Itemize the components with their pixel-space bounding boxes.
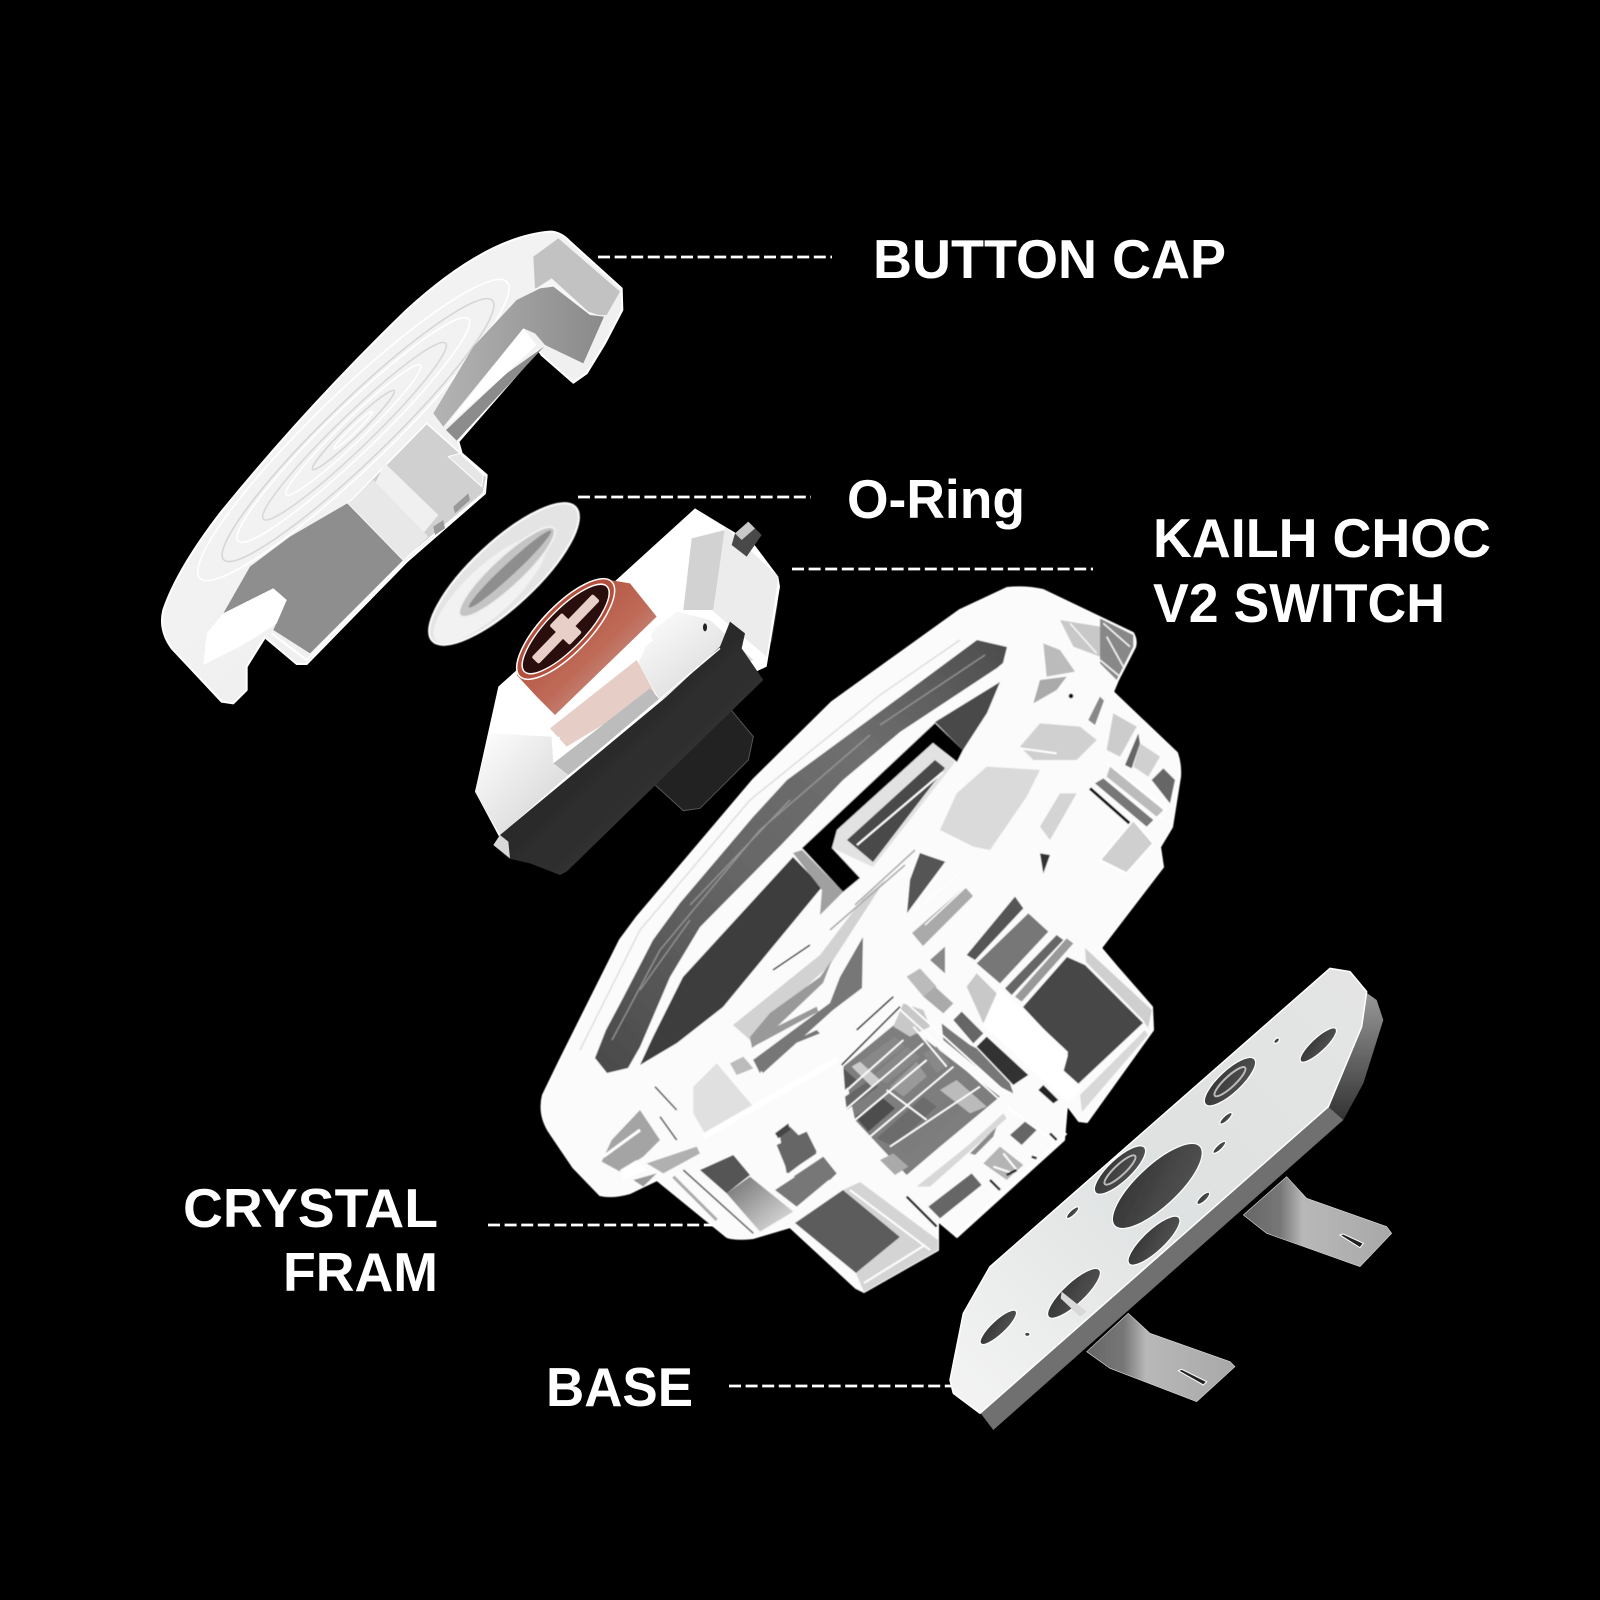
crystal top-right texture (1100, 618, 1133, 680)
label: Kailh Choc V2 switch: V2 SWITCH (1153, 572, 1445, 634)
cap upper inner recess (433, 287, 604, 427)
part: button cap (162, 232, 622, 703)
cage box (1100, 820, 1153, 873)
cap outer body (162, 232, 622, 703)
dark bar (977, 1037, 1028, 1085)
cage panels (1107, 713, 1137, 757)
cap top corner highlight (523, 278, 603, 317)
ring hole (465, 526, 555, 612)
switch peg (732, 522, 762, 557)
medium bar (942, 1023, 1013, 1093)
upper lens and cage (910, 618, 1175, 880)
small box (912, 887, 973, 946)
plate curved edge (1328, 992, 1383, 1120)
plate holes (976, 1024, 1341, 1349)
leader line: O-ring (578, 496, 811, 498)
stem cross (525, 588, 606, 670)
screw dot (1069, 694, 1073, 698)
leader line: switch (792, 568, 1093, 570)
red stem top (503, 565, 629, 693)
switch housing (475, 508, 780, 838)
cap white rib (445, 328, 537, 427)
rect A (967, 897, 1023, 960)
dark bottom wedge (910, 853, 945, 880)
switch mid face (638, 612, 753, 700)
label: Kailh Choc V2 switch: KAILH CHOC (1153, 507, 1491, 569)
part: base plate (950, 968, 1392, 1430)
rect B (977, 913, 1048, 983)
switch pink reflection (550, 660, 655, 747)
red stem side (517, 580, 657, 715)
label: Crystal Fram: FRAM (283, 1241, 438, 1303)
switch right face (713, 527, 778, 657)
gray square (953, 1012, 983, 1043)
bottom window lip (843, 1182, 938, 1292)
lens gray piece (1043, 643, 1075, 677)
lower left cells and corner (602, 1007, 837, 1233)
switch stud (653, 707, 753, 811)
ring lower highlight (420, 522, 560, 658)
hole inner rings (1101, 1064, 1249, 1188)
rear tab (1243, 1177, 1392, 1267)
switch base edge highlight (568, 648, 720, 777)
plate straight edge (979, 1107, 1343, 1430)
lower left cells (780, 1127, 817, 1173)
stem socket (511, 573, 621, 685)
switch foot (493, 835, 510, 858)
stripes (1005, 935, 1063, 995)
ring outer (411, 484, 597, 664)
label: Crystal Fram: CRYSTAL (183, 1177, 438, 1239)
switch lower face (475, 733, 568, 835)
guide strip (793, 850, 843, 915)
switch side sliver (765, 602, 778, 643)
leader line: button cap (598, 256, 832, 258)
label: BASE: BASE (546, 1356, 693, 1418)
label: Crystal Fram (183, 1177, 438, 1303)
switch pin dot (703, 623, 707, 631)
frame silhouette (542, 587, 1180, 1292)
label: BUTTON CAP: BUTTON CAP (873, 228, 1226, 290)
right lip shading (1085, 948, 1152, 1028)
cage wedge (1088, 697, 1104, 725)
ring inner groove (450, 517, 564, 627)
front tab (1087, 1313, 1235, 1402)
cage stripes (1095, 778, 1153, 827)
small dark (1038, 1085, 1058, 1103)
big dark insert (1023, 957, 1143, 1085)
small wedge (907, 853, 945, 913)
switch grey step (553, 688, 660, 775)
stem panel (832, 743, 955, 867)
label: Kailh Choc V2 switch (1153, 507, 1491, 634)
inner dark wedge lower (640, 857, 822, 1065)
cap face swirl lines (174, 255, 533, 605)
band streaks (612, 655, 985, 1040)
lens upper shade (1020, 723, 1097, 760)
bottom window (795, 1190, 900, 1273)
cap lower rim line (272, 562, 403, 660)
lens large shade (940, 767, 1040, 850)
label: O-Ring: O-Ring (847, 468, 1025, 530)
white insert (983, 988, 1082, 1103)
upper strip lines (830, 850, 915, 930)
right windows (780, 897, 1073, 1180)
cage cells (842, 997, 1007, 1175)
ring dark band (595, 640, 1007, 1073)
switch black base (493, 622, 763, 875)
part: O-ring (411, 484, 597, 664)
plate face (950, 968, 1367, 1413)
part: Kailh Choc V2 switch (475, 508, 780, 875)
part: crystal frame (542, 587, 1180, 1292)
leader line: base (729, 1385, 951, 1387)
ring outer highlight (580, 640, 960, 1050)
switch white divider (553, 637, 653, 718)
pin through hole (1061, 1292, 1087, 1317)
see-through slot (802, 723, 963, 892)
cap white hook (203, 588, 287, 665)
cap top shading (533, 238, 620, 315)
inner dark wedge upper (935, 682, 1000, 750)
cap inner rib (446, 347, 544, 441)
lower right cells (907, 1107, 1067, 1237)
cap snap block (348, 423, 487, 560)
switch top shade (683, 530, 725, 610)
leader line: crystal frame (488, 1224, 716, 1226)
lens crescents (733, 880, 885, 1073)
cap lower inner recess (223, 503, 403, 653)
transitional prism (967, 973, 997, 1023)
